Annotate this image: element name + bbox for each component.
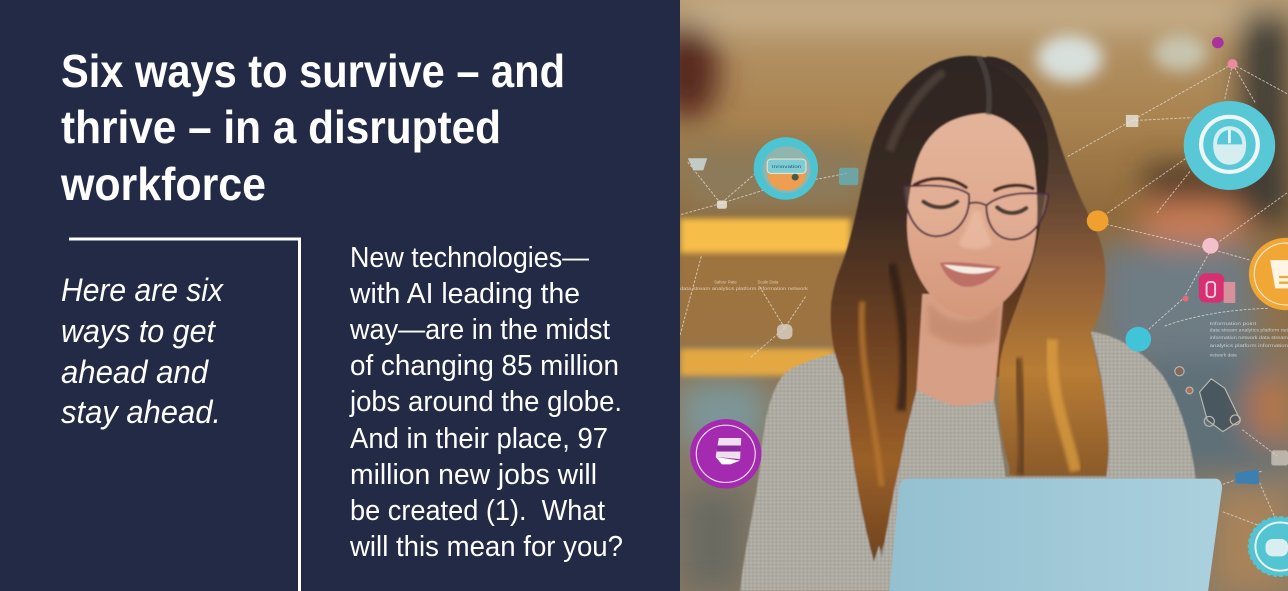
- bracket line: [69, 239, 300, 591]
- icon: teal gear envelope: [1249, 517, 1288, 576]
- body paragraph: be created (1). What: [350, 495, 605, 527]
- italic subheading: ways to get: [61, 313, 216, 349]
- icon: pink document card: [1199, 273, 1235, 303]
- woman figure: [740, 56, 1196, 591]
- italic subheading: Here are six: [61, 272, 224, 308]
- floating text, right: Information point: [1210, 321, 1257, 326]
- glasses: [904, 186, 1048, 239]
- italic subheading: ahead and: [61, 354, 209, 390]
- floating text, left: Safeur Rate: [714, 279, 737, 284]
- title: Six ways to survive – and: [61, 45, 565, 97]
- body paragraph: And in their place, 97: [350, 423, 608, 455]
- body paragraph: way—are in the midst: [349, 314, 610, 346]
- title: [60, 45, 565, 210]
- eyebrows: [915, 179, 1033, 190]
- floating: small circuit cluster: [1175, 367, 1240, 432]
- closed eyes: [924, 202, 1026, 213]
- floating text, left: Scale Data: [758, 279, 779, 284]
- body paragraph: jobs around the globe.: [349, 386, 622, 418]
- left text panel: [0, 0, 680, 591]
- photo background: [657, 0, 1288, 591]
- title: thrive – in a disrupted: [61, 101, 501, 153]
- neck: [917, 294, 1004, 406]
- body paragraph: with AI leading the: [349, 278, 580, 310]
- body paragraph: of changing 85 million: [350, 350, 619, 382]
- photo: woman with floating icons: [680, 0, 1288, 591]
- nose: [958, 211, 992, 249]
- body paragraph: New technologies—: [350, 242, 589, 274]
- title: workforce: [60, 158, 266, 210]
- icon: teal lock: [1184, 101, 1275, 190]
- laptop: [889, 479, 1222, 591]
- floating text, right: data stream analytics platform net: [1210, 328, 1288, 333]
- floating text, left: [680, 279, 809, 291]
- body paragraph: will this mean for you?: [349, 531, 623, 563]
- body paragraph: million new jobs will: [350, 459, 597, 491]
- floating text, right: network data: [1210, 353, 1238, 358]
- icon: purple device: [690, 419, 761, 488]
- floating text, right: [1210, 321, 1288, 358]
- icon: orange cart: [1249, 238, 1288, 310]
- front hair strands: [831, 56, 1109, 562]
- floating text, left: data stream analytics platform information network: [680, 286, 809, 291]
- icon: teal ring badge: Innovation: [772, 164, 802, 169]
- back hair: [831, 56, 1109, 562]
- sweater: [740, 332, 1196, 591]
- floating text, right: analytics platform information: [1210, 343, 1288, 348]
- network lines: [680, 64, 1288, 526]
- icon: teal ring badge: [754, 137, 818, 200]
- italic subheading: [61, 272, 224, 430]
- small node icons: [688, 37, 1288, 484]
- italic subheading: stay ahead.: [61, 394, 221, 430]
- face: [907, 113, 1037, 317]
- floating text, right: information network data stream: [1210, 335, 1288, 340]
- mouth: [940, 262, 1001, 287]
- body paragraph: [349, 242, 623, 563]
